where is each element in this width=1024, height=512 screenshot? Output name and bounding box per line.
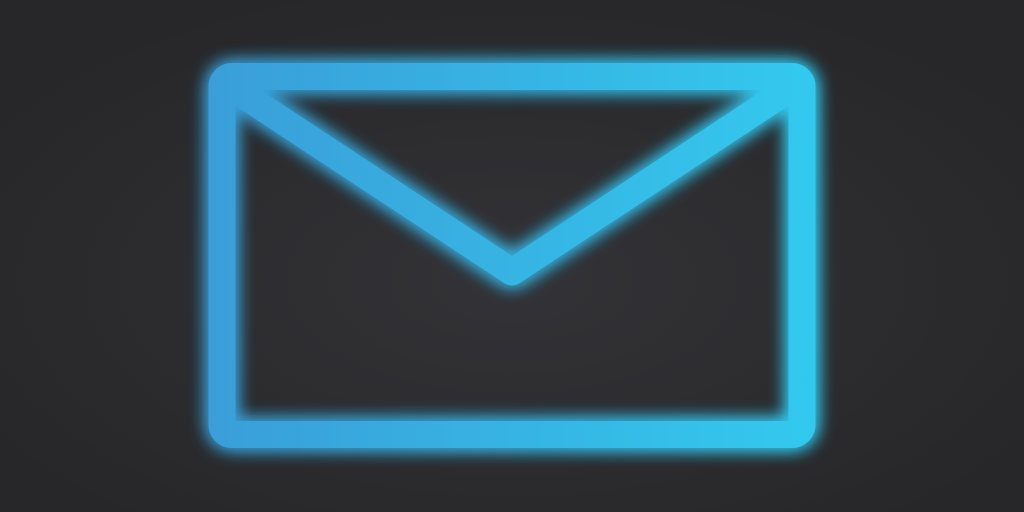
envelope body [222,76,802,434]
envelope flap [224,82,800,272]
icon: envelope [222,76,802,434]
